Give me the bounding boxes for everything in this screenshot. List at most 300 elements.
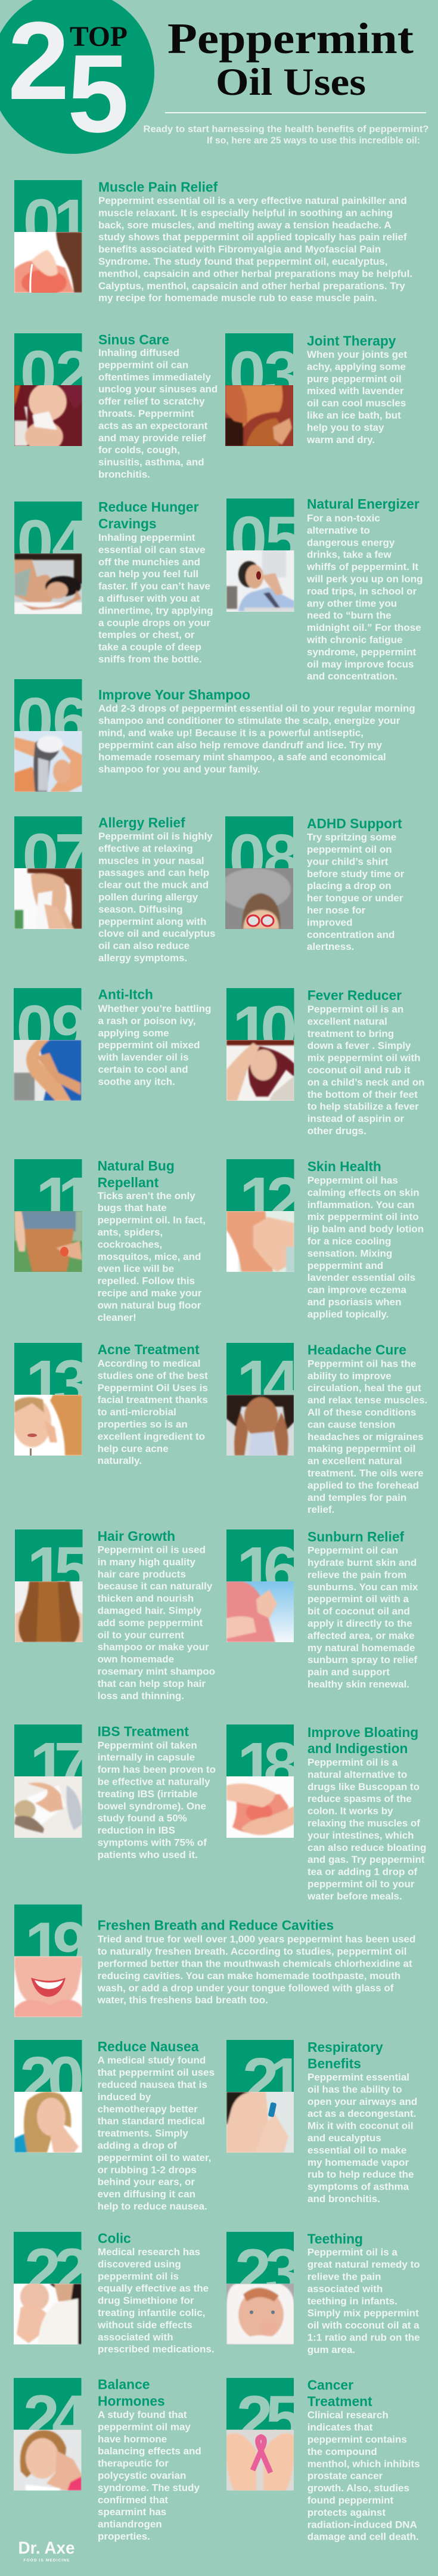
body text: reduction in IBS xyxy=(98,1825,175,1836)
body text: headaches or migraines xyxy=(307,1431,424,1442)
body text: excellent ingredient to xyxy=(98,1431,205,1442)
body text: antiandrogen xyxy=(98,2519,162,2530)
panel: 14 headache cure xyxy=(226,1342,427,1515)
photo: yawning man xyxy=(226,550,294,612)
body text: than standard medical xyxy=(98,2116,205,2127)
body text: mix peppermint oil with xyxy=(307,1052,421,1064)
body text: drinks, take a few xyxy=(307,549,392,561)
heading: Fever Reducer xyxy=(307,987,402,1003)
body text: adding a drop of xyxy=(98,2140,177,2151)
body text: any other time you xyxy=(307,597,397,609)
header badge: top 25 xyxy=(0,0,154,156)
body text: acts as an expectorant xyxy=(98,420,208,431)
heading: Natural Bug xyxy=(98,1158,175,1174)
photo: sunburned shoulder xyxy=(226,1581,294,1642)
body text: Syndrome. The study found that peppermint oil, eucalyptus, xyxy=(98,256,387,267)
photo: woman with headache xyxy=(226,1395,294,1456)
panel: 23 teething xyxy=(226,2231,420,2355)
photo: shoulder pain xyxy=(14,232,82,293)
body text: symptoms with 75% of xyxy=(98,1837,207,1849)
body text: the bottom of their feet xyxy=(307,1089,418,1100)
body text: dangerous energy xyxy=(307,537,395,548)
body text: can help you feel full xyxy=(98,568,198,580)
body text: peppermint can also help remove dandruff and lice. Try my xyxy=(98,739,383,751)
body text: and eucalyptus xyxy=(307,2132,381,2144)
body text: my natural homemade xyxy=(307,1642,415,1654)
panel: 22 colic xyxy=(14,2231,215,2355)
body text: bronchitis. xyxy=(98,469,150,480)
photo: mother with baby xyxy=(14,2283,82,2345)
body text: drugs like Buscopan to xyxy=(307,1781,420,1792)
body text: Clinical research xyxy=(307,2410,389,2421)
number 15: 15 xyxy=(27,1534,91,1607)
panel: 01 muscle pain relief xyxy=(14,179,412,304)
body text: Simply mix peppermint xyxy=(307,2308,419,2319)
body text: with chronic fatigue xyxy=(306,634,403,645)
body text: cleaner! xyxy=(98,1312,136,1323)
body text: and psoriasis when xyxy=(307,1296,401,1308)
body text: clove oil and eucalyptus xyxy=(98,928,216,939)
body text: help you to stay xyxy=(307,422,384,433)
body text: placing a drop on xyxy=(307,880,392,891)
body text: her nose for xyxy=(307,905,366,916)
number 02: 02 xyxy=(20,338,92,411)
heading: Teething xyxy=(307,2231,363,2247)
logo: Dr. Axe: Dr. Axe xyxy=(18,2539,75,2558)
body text: peppermint oil on xyxy=(307,844,392,855)
body text: sunburns. You can mix xyxy=(307,1581,418,1593)
body text: cockroaches, xyxy=(98,1239,162,1250)
body text: recipe and make your xyxy=(98,1287,202,1299)
body text: peppermint oil may xyxy=(98,2421,191,2432)
photo: child with red glasses xyxy=(225,868,293,929)
body text: temples or chest, or xyxy=(98,629,195,640)
body text: lip balm and body lotion xyxy=(307,1224,424,1235)
body text: study shows that peppermint oil applied topically has pain relief xyxy=(98,231,407,243)
body text: and may provide relief xyxy=(98,432,206,444)
body text: healthy skin renewal. xyxy=(307,1679,409,1690)
number 19: 19 xyxy=(25,1909,89,1983)
photo: inflamed belly xyxy=(226,1776,294,1838)
body text: muscles in your nasal xyxy=(98,855,204,866)
body text: Peppermint oil is a xyxy=(307,1757,398,1768)
panel: 09 anti-itch xyxy=(14,987,211,1101)
body text: peppermint oil with a xyxy=(307,1593,409,1605)
body text: mosquitos, mice, and xyxy=(98,1251,201,1262)
photo: long brown hair xyxy=(15,1581,82,1642)
panel: 18 improve bloating and indigestion xyxy=(226,1724,426,1902)
body text: balancing effects and xyxy=(98,2445,201,2457)
body text: pain and support xyxy=(307,1667,390,1678)
body text: shampoo and conditioner to stimulate the scalp, energize your xyxy=(98,715,400,726)
number 08: 08 xyxy=(229,821,300,894)
body text: own natural bug floor xyxy=(98,1299,201,1311)
photo: face in mirror xyxy=(14,1395,82,1456)
body text: Medical research has xyxy=(98,2246,200,2258)
body text: confirmed that xyxy=(98,2494,168,2506)
body text: help to reduce nausea. xyxy=(98,2200,207,2212)
title: Oil Uses xyxy=(216,61,366,104)
body text: own homemade xyxy=(98,1654,174,1665)
body text: All of these conditions xyxy=(307,1407,416,1418)
heading: Acne Treatment xyxy=(98,1342,200,1357)
body text: Ticks aren’t the only xyxy=(98,1190,195,1202)
heading: Improve Bloating xyxy=(307,1724,418,1740)
number 06: 06 xyxy=(17,685,89,758)
body text: sunburn spray to relief xyxy=(307,1654,418,1665)
body text: performed better than the mouthwash chemicals chlorhexidine at xyxy=(98,1958,412,1969)
body text: therapeutic for xyxy=(98,2458,169,2469)
panel: 03 joint therapy xyxy=(225,333,407,446)
body text: other drugs. xyxy=(307,1125,366,1137)
body text: passages and can help xyxy=(98,867,209,878)
body text: wash, or add a drop under your tongue followed with glass of xyxy=(97,1982,394,1993)
photo: nauseous woman xyxy=(14,2092,82,2153)
body text: need to “burn the xyxy=(307,610,392,621)
body text: shampoo or make your xyxy=(98,1642,209,1653)
panel: 12 skin health xyxy=(226,1159,424,1320)
logo: Dr. Axe: FOOD IS MEDICINE xyxy=(23,2559,70,2563)
body text: and temples for pain xyxy=(307,1492,406,1503)
body text: without side effects xyxy=(97,2319,192,2330)
body text: Peppermint oil is an xyxy=(307,1004,403,1015)
body text: can cause tension xyxy=(307,1419,395,1430)
body text: and bronchitis. xyxy=(307,2193,380,2205)
photo: woman using inhaler xyxy=(226,2092,294,2153)
heading: Reduce Hunger xyxy=(98,499,199,515)
body text: oftentimes immediately xyxy=(98,371,211,383)
body text: peppermint oil can xyxy=(98,359,188,370)
photo: hands with pink ribbon xyxy=(226,2430,295,2491)
body text: oil can cool muscles xyxy=(307,398,406,409)
body text: open your airways and xyxy=(307,2096,417,2107)
heading: Muscle Pain Relief xyxy=(98,179,218,194)
heading line 2: Repellant xyxy=(98,1175,159,1190)
body text: that can help stop hair xyxy=(98,1678,206,1689)
body text: instead of aspirin or xyxy=(307,1113,405,1125)
body text: found peppermint xyxy=(307,2495,394,2506)
body text: on a child’s neck and on xyxy=(307,1076,424,1088)
body text: patients who used it. xyxy=(98,1849,198,1860)
number 18: 18 xyxy=(237,1729,300,1803)
body text: spearmint has xyxy=(98,2506,166,2518)
photo: woman with hand on head xyxy=(14,2430,82,2491)
panel: 07 allergy relief xyxy=(14,815,216,964)
header badge: top 25: 5 xyxy=(67,32,129,156)
body text: peppermint oil to your xyxy=(307,1878,415,1890)
heading: Headache Cure xyxy=(307,1342,406,1357)
panel: 19 freshen breath and reduce cavities xyxy=(14,1905,415,2017)
body text: dinnertime, try applying xyxy=(98,605,213,616)
number 20: 20 xyxy=(20,2044,84,2117)
number 25: 25 xyxy=(237,2383,302,2456)
body text: reduce spasms of the xyxy=(307,1793,412,1804)
body text: rosemary mint shampoo xyxy=(98,1666,215,1677)
number 11 xyxy=(14,1159,94,1237)
body text: chemotherapy better xyxy=(98,2103,198,2114)
body text: peppermint along with xyxy=(98,916,206,927)
body text: Peppermint oil is highly xyxy=(98,831,213,842)
body text: soothe any itch. xyxy=(98,1076,175,1087)
body text: behind your ears, or xyxy=(98,2176,195,2188)
heading: Anti-Itch xyxy=(98,987,153,1002)
body text: bit of coconut oil and xyxy=(307,1606,410,1617)
body text: for a nice cooling xyxy=(307,1236,391,1247)
body text: peppermint oil is xyxy=(98,2271,179,2282)
body text: induced by xyxy=(98,2091,151,2103)
body text: A medical study found xyxy=(98,2055,206,2066)
body text: a diffuser with you at xyxy=(98,593,200,604)
number 09: 09 xyxy=(16,992,88,1066)
number 05: 05 xyxy=(231,503,302,577)
heading: Sinus Care xyxy=(98,332,169,347)
body text: loss and thinning. xyxy=(98,1690,184,1701)
body text: warm and dry. xyxy=(306,434,375,445)
body text: and gas. Try peppermint xyxy=(307,1854,425,1865)
body text: associated with xyxy=(307,2283,383,2295)
body text: form has been proven to xyxy=(98,1764,216,1775)
body text: homemade rosemary mint shampoo, a safe and economical xyxy=(98,751,386,763)
heading line 2: Hormones xyxy=(98,2393,165,2408)
photo: woman washing hair xyxy=(14,731,82,792)
body text: your child’s shirt xyxy=(307,856,389,867)
body text: Peppermint oil can xyxy=(307,1545,398,1556)
photo: baby in towel xyxy=(226,2284,294,2345)
body text: affected area, or make xyxy=(307,1630,415,1641)
body text: protects against xyxy=(307,2507,386,2518)
body text: can improve eczema xyxy=(307,1284,407,1296)
body text: and relax tense muscles. xyxy=(307,1395,427,1406)
heading line 2: Benefits xyxy=(307,2055,361,2071)
body text: reduced nausea that is xyxy=(98,2079,207,2091)
body text: can also reduce bloating xyxy=(307,1842,426,1853)
body text: off the munchies and xyxy=(98,556,200,568)
panel: 17 ibs treatment xyxy=(14,1724,216,1860)
body text: offer relief to scratchy xyxy=(98,396,205,407)
number 12: 12 xyxy=(240,1164,303,1237)
body text: equally effective as the xyxy=(98,2283,209,2294)
body text: Peppermint essential oil is a very effective natural painkiller and xyxy=(98,195,407,206)
body text: study found a 50% xyxy=(98,1813,187,1824)
body text: oil may improve focus xyxy=(307,658,414,670)
photo: scratching skin xyxy=(226,1211,294,1272)
intro text: Ready to start harnessing the health benefits of peppermint? xyxy=(143,124,429,135)
body text: relieve the pain from xyxy=(307,1569,406,1580)
body text: midnight oil.” For those xyxy=(307,622,421,633)
body text: even diffusing it can xyxy=(98,2188,195,2200)
body text: Calyptus, menthol, capsaicin and other herbal preparations. Try xyxy=(98,280,405,292)
body text: When your joints get xyxy=(307,349,407,360)
body text: properties so is an xyxy=(98,1419,188,1430)
body text: Peppermint oil has xyxy=(307,1175,398,1186)
heading: Sunburn Relief xyxy=(307,1529,405,1544)
body text: before study time or xyxy=(307,868,405,880)
body text: Peppermint essential xyxy=(307,2072,409,2083)
body text: mixed with lavender xyxy=(307,385,404,397)
body text: apply it directly to the xyxy=(307,1618,412,1629)
body text: unclog your sinuses and xyxy=(98,383,218,395)
panel: 04 reduce hunger cravings xyxy=(14,499,213,665)
body text: rub to help reduce the xyxy=(307,2169,414,2180)
body text: a couple drops on your xyxy=(98,617,210,628)
body text: to help stabilize a fever xyxy=(307,1101,419,1112)
body text: growth. Also, studies xyxy=(307,2482,409,2494)
body text: act as a decongestant. xyxy=(307,2108,416,2119)
body text: Add 2-3 drops of peppermint essential oil to your regular morning xyxy=(98,703,415,714)
body text: drug Simethione for xyxy=(98,2295,194,2306)
body text: treatment. The oils were xyxy=(307,1467,424,1479)
body text: menthol, which inhibits xyxy=(307,2458,420,2469)
body text: indicates that xyxy=(307,2422,373,2433)
number 04: 04 xyxy=(17,507,88,580)
body text: discovered using xyxy=(98,2258,181,2270)
body text: properties. xyxy=(98,2531,150,2542)
body text: muscle relaxant. It is especially helpful in soothing an aching xyxy=(98,207,393,218)
body text: take a couple of deep xyxy=(98,642,201,653)
body text: because it can naturally xyxy=(98,1581,213,1592)
body text: essential oil to make xyxy=(307,2144,406,2156)
body text: damaged hair. Simply xyxy=(98,1605,202,1616)
body text: sinusitis, asthma, and xyxy=(98,457,204,468)
panel: 20 reduce nausea xyxy=(14,2039,215,2212)
body text: alternative to xyxy=(307,525,370,536)
body text: According to medical xyxy=(98,1358,200,1369)
body text: back, sore muscles, and melting away a tension headache. A xyxy=(98,219,392,231)
body text: oil with coconut oil at a xyxy=(307,2320,420,2331)
header badge: top 25: 2 xyxy=(8,0,69,123)
body text: naturally. xyxy=(98,1455,142,1466)
heading line 2: Treatment xyxy=(307,2394,372,2409)
body text: 1:1 ratio and rub on the xyxy=(307,2332,420,2343)
body text: Peppermint oil taken xyxy=(98,1739,197,1751)
body text: season. Diffusing xyxy=(98,903,183,915)
body text: help cure acne xyxy=(98,1443,169,1454)
body text: For a non-toxic xyxy=(307,513,380,524)
body text: Peppermint oil has the xyxy=(307,1358,416,1369)
heading: Improve Your Shampoo xyxy=(98,687,250,702)
body text: Mix it with coconut oil xyxy=(307,2120,414,2132)
body text: treatment to bring xyxy=(307,1028,394,1039)
body text: certain to cool and xyxy=(98,1064,188,1075)
body text: applying some xyxy=(98,1027,169,1039)
body text: prostate cancer xyxy=(307,2470,383,2482)
body text: my homemade vapor xyxy=(307,2157,409,2168)
body text: have hormone xyxy=(98,2433,167,2445)
heading: Reduce Nausea xyxy=(98,2039,199,2054)
body text: shampoo for you and your family. xyxy=(98,764,260,775)
body text: menthol, capsaicin and other herbal preparations may be helpful. xyxy=(98,268,412,279)
number 03: 03 xyxy=(229,338,300,411)
body text: syndrome. The study xyxy=(98,2482,200,2493)
panel: 10 fever reducer xyxy=(226,987,424,1137)
body text: water before meals. xyxy=(307,1890,402,1902)
intro text: If so, here are 25 ways to use this incredible oil: xyxy=(207,136,420,145)
heading: ADHD Support xyxy=(307,816,402,831)
body text: internally in capsule xyxy=(98,1752,195,1763)
body text: Peppermint oil is used xyxy=(98,1544,206,1555)
panel: 15 hair growth xyxy=(15,1528,215,1701)
panel: 02 sinus care xyxy=(14,332,218,480)
number 16: 16 xyxy=(237,1534,300,1607)
body text: even lice will be xyxy=(98,1263,174,1274)
body text: mind, and wake up! Because it is a powerful antiseptic, xyxy=(98,727,364,738)
number 13: 13 xyxy=(26,1347,90,1420)
number 23: 23 xyxy=(235,2236,302,2309)
body text: my recipe for homemade muscle rub to ease muscle pain. xyxy=(98,292,377,304)
body text: relieve the pain xyxy=(307,2271,381,2283)
body text: prescribed medications. xyxy=(98,2343,215,2355)
photo: woman with fever xyxy=(226,1040,294,1101)
body text: effective at relaxing xyxy=(98,843,193,854)
body text: Inhaling diffused xyxy=(98,347,179,358)
body text: your intestines, which xyxy=(307,1829,414,1841)
body text: applied topically. xyxy=(307,1308,389,1320)
heading: Freshen Breath and Reduce Cavities xyxy=(98,1918,334,1933)
body text: to naturally freshen breath. According to studies, peppermint oil xyxy=(98,1946,406,1957)
number 21: 21 xyxy=(243,2045,304,2118)
body text: teething in infants. xyxy=(307,2295,397,2306)
body text: and concentration. xyxy=(307,671,397,682)
body text: add some peppermint xyxy=(98,1617,203,1628)
heading: Respiratory xyxy=(307,2039,383,2055)
body text: natural alternative to xyxy=(307,1769,407,1780)
body text: associated with xyxy=(98,2332,173,2343)
body text: Peppermint oil is a xyxy=(307,2247,397,2258)
body text: excellent natural xyxy=(307,1015,387,1027)
body text: improved xyxy=(307,917,353,928)
photo: woman with handkerchief xyxy=(14,868,82,929)
body text: to anti-microbial xyxy=(98,1407,176,1418)
body text: polycystic ovarian xyxy=(98,2470,186,2481)
number 11: 11 xyxy=(36,1164,94,1237)
body text: an excellent natural xyxy=(307,1456,402,1467)
body text: radiation-induced DNA xyxy=(307,2519,417,2530)
body text: achy, applying some xyxy=(307,361,406,372)
body text: mix peppermint oil into xyxy=(307,1211,419,1222)
body text: oil to your current xyxy=(98,1629,184,1640)
heading line 2: Cravings xyxy=(98,516,157,531)
body text: throats. Peppermint xyxy=(98,408,194,419)
body text: road trips, in school or xyxy=(307,586,417,597)
body text: hair care products xyxy=(98,1568,186,1580)
body text: will perk you up on long xyxy=(306,574,423,584)
body text: essential oil can stave xyxy=(98,544,206,555)
body text: thicken and nourish xyxy=(98,1593,194,1604)
photo: spraying leg xyxy=(14,1211,82,1272)
body text: the compound xyxy=(307,2446,377,2457)
body text: colon. It works by xyxy=(307,1806,393,1817)
title xyxy=(167,14,414,104)
body text: calming effects on skin xyxy=(307,1187,420,1198)
body text: applied to the forehead xyxy=(307,1479,419,1491)
body text: concentration and xyxy=(307,929,394,940)
heading: Allergy Relief xyxy=(98,815,185,830)
body text: treating infantile colic, xyxy=(98,2307,205,2318)
body text: like an ice bath, but xyxy=(307,410,401,421)
body text: faster. If you can’t have xyxy=(98,581,210,592)
heading line 2: and Indigestion xyxy=(307,1741,408,1756)
photo: woman lying in bed xyxy=(14,553,82,614)
body text: great natural remedy to xyxy=(307,2259,420,2270)
header badge: top 25: TOP xyxy=(70,21,128,52)
body text: studies one of the best xyxy=(98,1370,208,1381)
photo: woman with tissue xyxy=(14,385,82,446)
body text: facial treatment thanks xyxy=(98,1394,208,1405)
photo: scratching arm xyxy=(14,1040,81,1101)
heading: Joint Therapy xyxy=(307,333,396,348)
body text: peppermint contains xyxy=(307,2434,407,2445)
body text: repelled. Follow this xyxy=(98,1275,195,1287)
